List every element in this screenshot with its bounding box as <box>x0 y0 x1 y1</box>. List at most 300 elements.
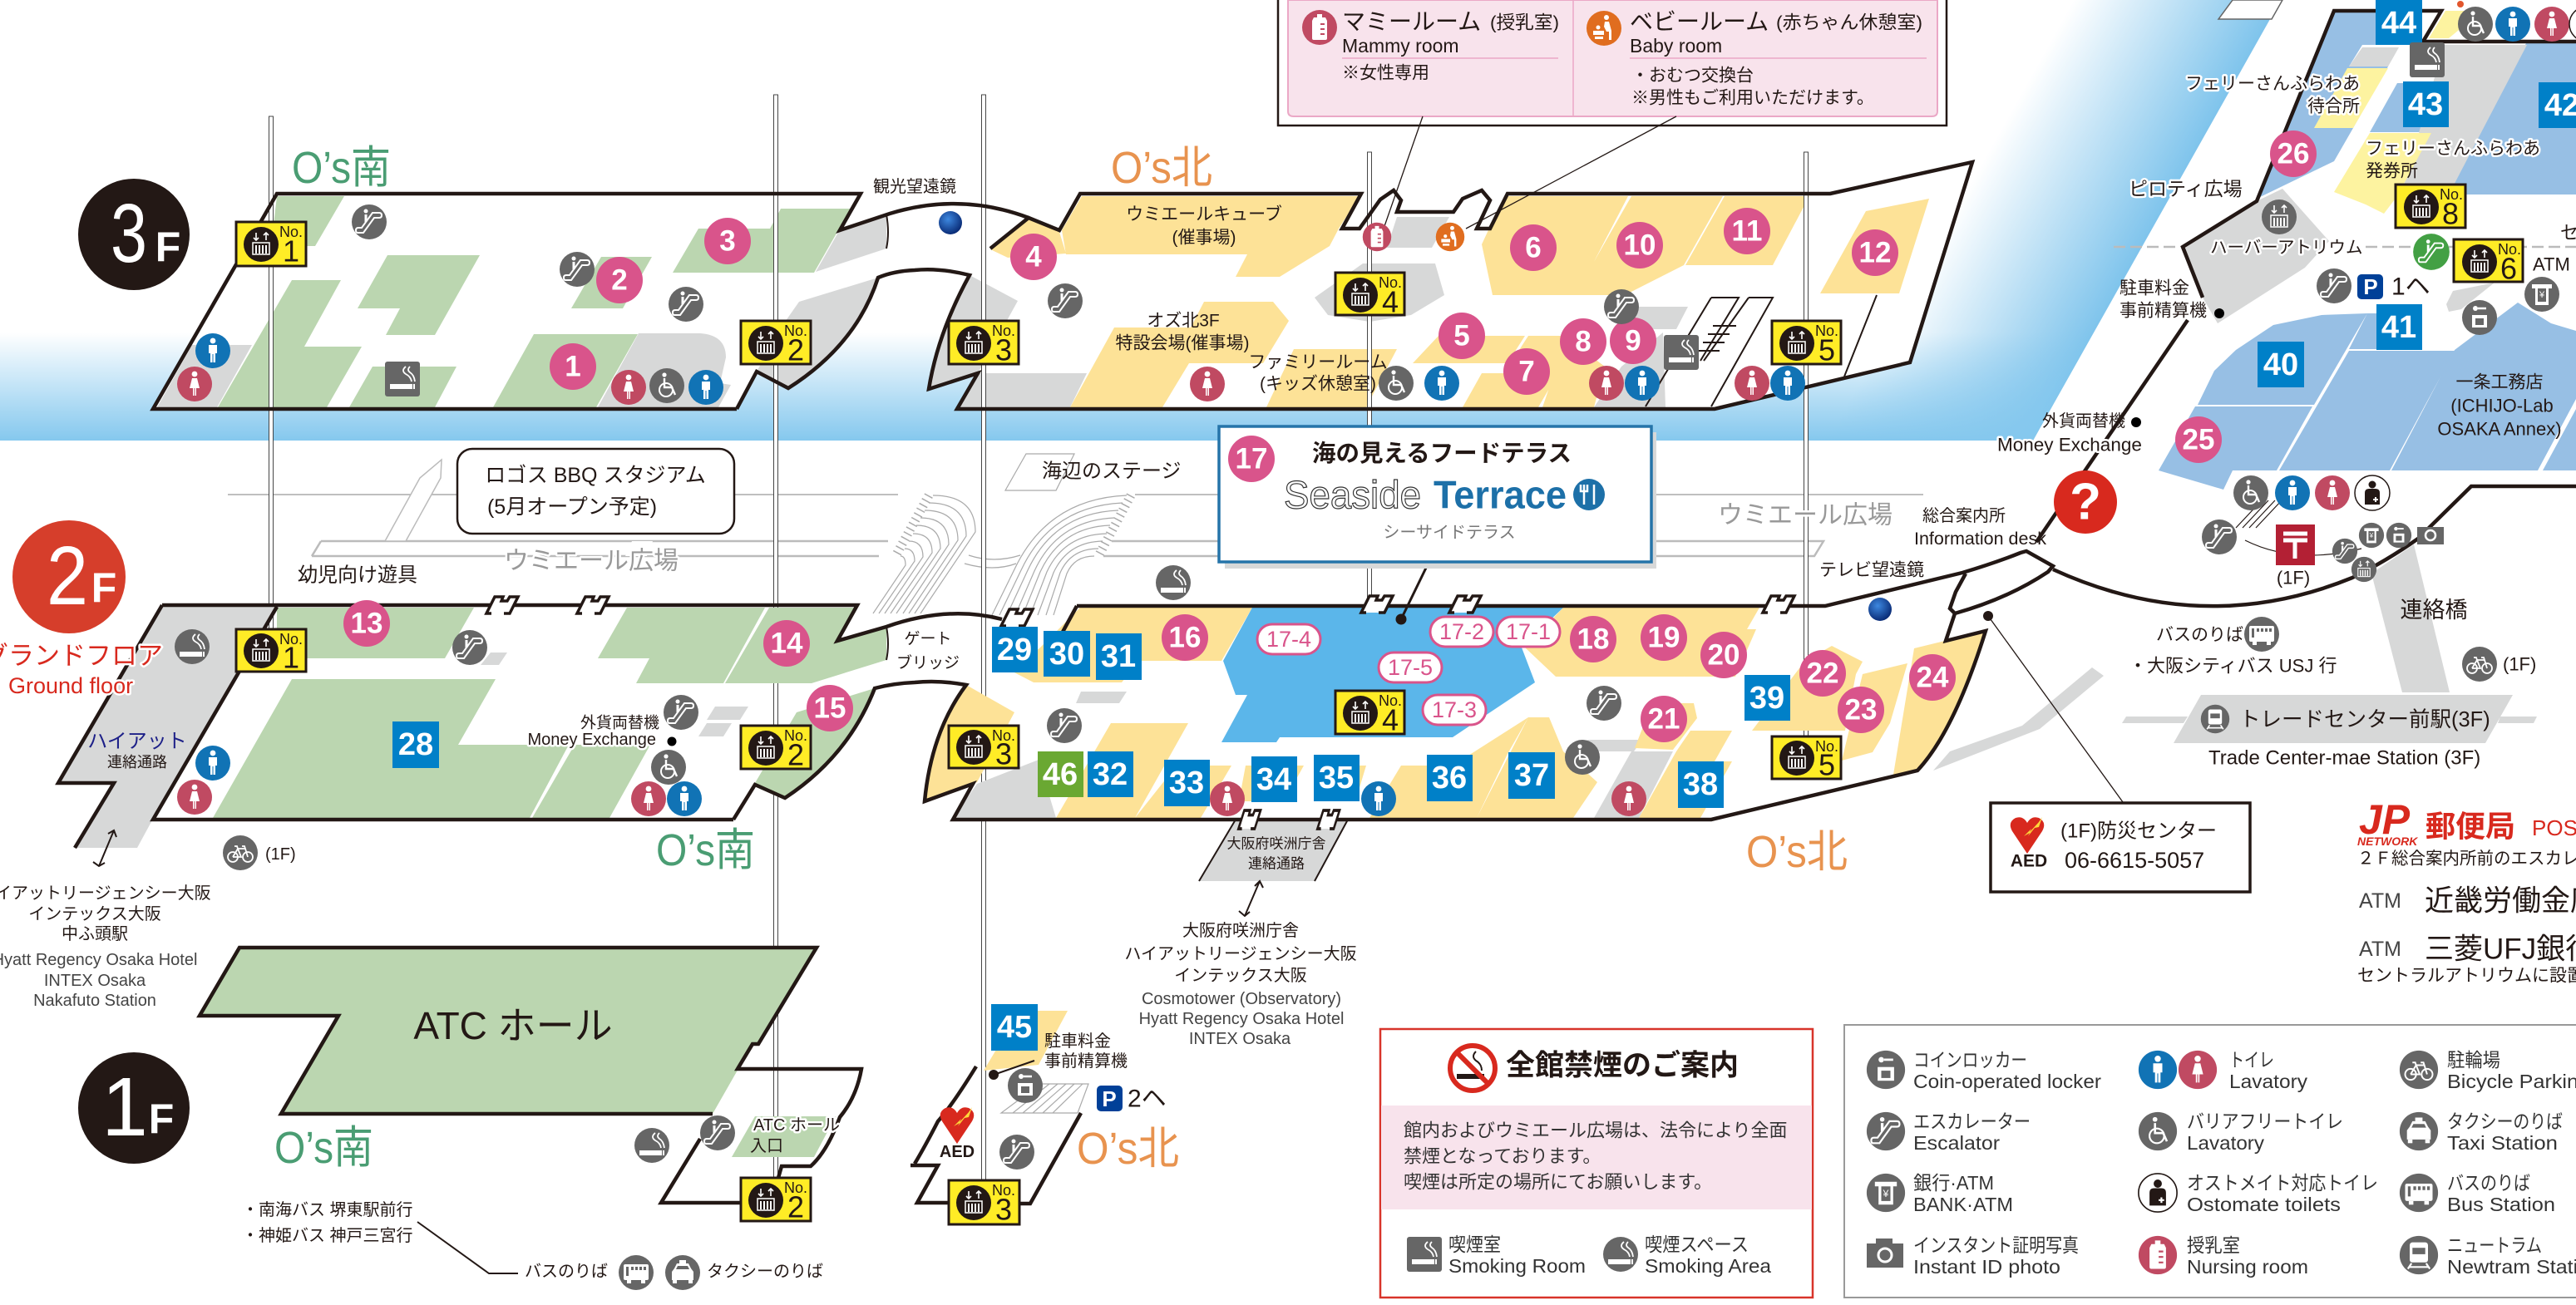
leader line to bus stop <box>417 1222 518 1273</box>
icon: baby room marker <box>1436 223 1464 251</box>
heading O's south 1F: O’s南 <box>274 1123 373 1173</box>
icon: parking P1: 1ヘ <box>2391 273 2430 301</box>
label: ATC hall entrance: 入口 <box>750 1137 783 1155</box>
icon: AED <box>940 1107 975 1161</box>
label: kids playground: 幼児向け遊具 <box>298 564 417 587</box>
text: ATM MUFG: ATM <box>2359 938 2401 961</box>
label: hyatt corridor: 連絡通路 <box>107 754 167 771</box>
shop 45: 45 <box>997 1010 1032 1045</box>
legend: smoking area <box>1603 1234 1771 1277</box>
shop 33: 33 <box>1169 766 1204 800</box>
marker 25 <box>2175 416 2222 463</box>
icon: no smoking <box>1450 1046 1495 1091</box>
heading: post office <box>2425 810 2576 843</box>
floor badge 1F <box>78 1052 190 1164</box>
marker 4: 4 <box>1025 241 1042 273</box>
legend: bus <box>2400 1172 2555 1215</box>
icon: elevator No.4 2F: No. <box>1379 692 1402 709</box>
legend: taxi <box>2400 1110 2563 1154</box>
icon: parking P2 <box>1097 1086 1167 1112</box>
3F outline <box>153 162 1972 409</box>
marker 11: 11 <box>1731 214 1763 248</box>
heading O's south 3F: O’s南 <box>292 143 391 193</box>
heading O's north 3F: O’s北 <box>1111 143 1212 193</box>
label: information desk: Information desk <box>1914 529 2046 549</box>
panel: seaside terrace sign <box>1219 426 1656 625</box>
label: ichijo: 一条工務店 <box>2456 372 2543 392</box>
icon: parking P2: P <box>1102 1086 1117 1111</box>
marker 8 <box>1560 318 1606 365</box>
legend: bus: Bus Station <box>2447 1194 2555 1215</box>
label: seaside stage: 海辺のステージ <box>1042 460 1182 482</box>
legend: smoking area: 喫煙スペース <box>1645 1234 1749 1255</box>
shop 28 <box>392 721 439 768</box>
panel: 2F floor plan <box>58 551 2053 1071</box>
callout: nursing and baby rooms <box>1278 0 1947 229</box>
icon: elevator No.8: 8 <box>2442 196 2459 231</box>
shop 44 <box>2376 0 2422 45</box>
note: women only: ※女性専用 <box>1342 63 1429 83</box>
icon: elevator No.1 3F: 1 <box>283 234 299 268</box>
icon: locker 1F <box>1008 1068 1043 1103</box>
icon: escalators 3F <box>352 204 1639 324</box>
label: bicycle 1F right <box>2462 647 2536 682</box>
terrace 17-5: 17-5 <box>1388 655 1433 680</box>
legend: ostomate: Ostomate toilets <box>2187 1194 2341 1215</box>
panel: harbor side building <box>1933 1 2576 771</box>
terrace 17-2: 17-2 <box>1439 619 1484 644</box>
label: cube <box>1126 204 1282 248</box>
legend: smoking room <box>1407 1234 1586 1277</box>
text: bus routes 1F: ・南海バス 堺東駅前行 <box>242 1200 413 1219</box>
callout: AED center <box>1983 611 2250 892</box>
icon: elevator No.3 3F: 3 <box>995 332 1012 367</box>
icon: telescope ball 2F <box>1868 598 1892 621</box>
marker 3: 3 <box>719 224 736 258</box>
floor badge 3F <box>78 179 190 290</box>
label: harbor atrium: ハーバーアトリウム <box>2210 238 2362 258</box>
shop 32: 32 <box>1093 757 1128 792</box>
label: plaza right: ウミエール広場 <box>1718 502 1893 529</box>
heading: post office: 郵便局 <box>2425 810 2515 843</box>
icon: elevator No.1 3F: No. <box>279 224 303 240</box>
subtitle: シーサイドテラス <box>1383 524 1516 542</box>
legend: lavatory: Lavatory <box>2229 1071 2308 1092</box>
shop 40: 40 <box>2263 347 2298 382</box>
icon: elevator No.1 3F <box>236 222 306 268</box>
legend: locker: Coin-operated locker <box>1913 1071 2101 1092</box>
marker 10: 10 <box>1624 229 1656 261</box>
icon: escalator atrium <box>2317 268 2351 303</box>
label: ATM right: ATM <box>2533 254 2570 274</box>
legend: camera: Instant ID photo <box>1913 1256 2060 1278</box>
marker 22: 22 <box>1807 657 1838 690</box>
shop 29: 29 <box>997 633 1032 667</box>
label: money exchange 2F: Money Exchange <box>527 731 656 749</box>
label: taxi stop 1F <box>665 1255 823 1290</box>
terrace 17-4: 17-4 <box>1266 627 1311 652</box>
icon: bicycle parking: (1F) <box>265 845 296 864</box>
label: baby room <box>1630 8 1922 57</box>
text: cosmotower destinations: インテックス大阪 <box>1174 966 1307 985</box>
legend: barrier-free: Lavatory <box>2187 1132 2265 1154</box>
shop 43 <box>2403 81 2449 127</box>
marker 1 <box>550 343 596 390</box>
icon: parking P1 <box>2357 273 2430 301</box>
icon: camera <box>2417 527 2444 544</box>
markers: harbor side <box>1914 0 2576 770</box>
label: ferry waiting <box>2185 75 2360 116</box>
marker 19: 19 <box>1648 622 1680 653</box>
icon: elevator No.5 3F: No. <box>1815 323 1838 339</box>
icon: elevator No.2 3F: No. <box>784 323 807 339</box>
text: cosmotower destinations: Cosmotower (Observatory) <box>1142 990 1341 1008</box>
icon: elevator No.5 3F <box>1772 321 1841 367</box>
label: piloti plaza: ピロティ広場 <box>2129 178 2243 199</box>
marker 7 <box>1503 348 1550 395</box>
panel: icon legend <box>1844 1025 2576 1298</box>
label: gate bridge: ゲート <box>904 630 952 648</box>
marker 2: 2 <box>611 264 628 296</box>
label: information desk <box>1914 506 2046 549</box>
shop 31: 31 <box>1101 639 1136 674</box>
plaza road lines and stage <box>228 454 1923 615</box>
shop 37: 37 <box>1514 758 1549 793</box>
shop 31 <box>1096 633 1142 680</box>
icon: grey elevator atrium <box>2262 199 2297 234</box>
text: hyatt destinations: Nakafuto Station <box>33 992 156 1010</box>
icon: elevator No.1 2F: No. <box>279 631 303 648</box>
marker 24 <box>1909 654 1956 701</box>
shop 29 <box>992 627 1038 672</box>
legend: escalator: エスカレーター <box>1913 1110 2031 1132</box>
marker 23 <box>1838 687 1884 733</box>
floor badge 1F: F <box>149 1096 174 1142</box>
text: bus routes 1F: ・神姫バス 神戸三宮行 <box>242 1226 413 1245</box>
label: cube: (催事場) <box>1172 228 1236 248</box>
shop 40 <box>2258 342 2304 387</box>
icon: elevator No.3 1F: No. <box>992 1182 1015 1199</box>
icon: elevator No.2 2F: No. <box>784 727 807 744</box>
legend: lavatory: トイレ <box>2229 1049 2274 1071</box>
icon: elevator No.3 1F: 3 <box>995 1192 1012 1227</box>
icon: elevator No.3 2F <box>949 726 1019 771</box>
floor badge 2F: F <box>91 564 116 611</box>
icon: lavatories atrium <box>2233 475 2390 510</box>
label: family room: (キッズ休憩室) <box>1260 374 1376 394</box>
icon: telescope ball 3F <box>939 211 962 234</box>
panel: post office and bank info <box>2357 796 2576 986</box>
icon: small services <box>2332 523 2411 582</box>
label: ferry ticket: 発券所 <box>2366 161 2418 181</box>
label: bicycle 1F right: (1F) <box>2503 653 2536 675</box>
legend: barrier-free <box>2139 1110 2343 1154</box>
sea background band <box>0 0 2282 441</box>
marker 3 <box>704 218 751 264</box>
legend: lavatory <box>2139 1049 2308 1092</box>
legend: bicycle: 駐輪場 <box>2447 1049 2500 1071</box>
icon: elevator No.4 3F: 4 <box>1382 284 1399 319</box>
label: parking payment 1F <box>1044 1032 1128 1071</box>
shop 39: 39 <box>1749 681 1784 716</box>
shop 36 <box>1427 755 1473 801</box>
callout: AED center: (1F)防災センター <box>2060 820 2217 843</box>
marker 23: 23 <box>1845 693 1877 726</box>
leader dot <box>989 1061 1034 1080</box>
terrace 17-5 <box>1379 652 1442 682</box>
legend: smoking room: Smoking Room <box>1448 1255 1586 1277</box>
label: parking payment 1F: 駐車料金 <box>1044 1032 1111 1051</box>
marker 1: 1 <box>565 351 581 382</box>
label: baby room: (赤ちゃん休憩室) <box>1776 12 1922 33</box>
marker 20: 20 <box>1708 638 1740 672</box>
logo: JP network: NETWORK <box>2357 835 2418 848</box>
legend: newtram <box>2400 1234 2576 1278</box>
plan callout: BBQ stadium <box>457 449 734 534</box>
marker 17: 17 <box>1236 442 1267 475</box>
marker 5 <box>1439 313 1485 359</box>
marker 6 <box>1510 224 1557 271</box>
label: ATC hall: ATC ホール <box>413 1004 613 1047</box>
text: cosmotower destinations <box>1124 921 1357 1048</box>
floor badge 3F: 3 <box>111 187 147 280</box>
marker 14: 14 <box>771 627 803 660</box>
legend: newtram: ニュートラム <box>2447 1234 2542 1256</box>
label: ichijo: OSAKA Annex) <box>2437 419 2562 439</box>
marker 17 <box>1228 436 1275 482</box>
icon: elevator No.8: No. <box>2440 186 2463 203</box>
label: ferry ticket <box>2366 140 2540 181</box>
legend: bicycle: Bicycle Parking <box>2447 1071 2576 1092</box>
info circle <box>2054 470 2117 534</box>
marker 24: 24 <box>1917 662 1949 693</box>
label: parking payment 1F: 事前精算機 <box>1044 1051 1128 1071</box>
icon: elevator No.2 2F <box>741 726 811 771</box>
icon: mammy room <box>1302 10 1337 45</box>
shop 38: 38 <box>1683 767 1718 802</box>
icon: elevator No.2 1F <box>741 1178 811 1224</box>
logo: seaside terrace: Seaside <box>1284 472 1421 517</box>
label: mammy room <box>1342 8 1559 57</box>
label: ground floor <box>0 642 163 698</box>
icon: cutlery <box>1573 479 1605 510</box>
label: gate bridge: ブリッジ <box>896 653 960 672</box>
label: family room: ファミリールーム <box>1248 352 1388 372</box>
label: telescope: 観光望遠鏡 <box>873 177 956 196</box>
shop 28: 28 <box>398 727 433 762</box>
icon: elevator No.3 3F <box>949 321 1019 367</box>
marker 9 <box>1610 318 1656 364</box>
legend: nursing room: 授乳室 <box>2187 1234 2240 1256</box>
legend: barrier-free: バリアフリートイレ <box>2187 1110 2343 1132</box>
legend: smoking room: 喫煙室 <box>1448 1234 1501 1255</box>
callout: AED center: 06-6615-5057 <box>2065 848 2204 873</box>
panel: no smoking notice <box>1380 1029 1813 1298</box>
marker 18 <box>1570 616 1616 662</box>
legend: smoking area: Smoking Area <box>1645 1255 1771 1277</box>
icon: elevator No.5 2F: No. <box>1815 738 1838 755</box>
icon: locker <box>2462 300 2497 335</box>
icon: escalator 1F south <box>700 1115 735 1150</box>
marker 16 <box>1162 614 1208 661</box>
panel: 1F floor plan south <box>200 948 861 1224</box>
marker 5: 5 <box>1453 319 1470 352</box>
marker 13: 13 <box>351 607 382 640</box>
shop 38 <box>1678 761 1724 808</box>
icon: lavatories 2F <box>177 740 1646 816</box>
icon: elevator No.3 3F: No. <box>992 323 1015 339</box>
vertical elevator shafts <box>269 95 1808 1182</box>
legend: escalator: Escalator <box>1913 1132 2000 1154</box>
logo: seaside terrace <box>1284 472 1567 517</box>
label: prefectural corridor: 連絡通路 <box>1248 856 1305 871</box>
floor badge 1F: 1 <box>101 1061 148 1154</box>
icon: elevator No.5 2F: 5 <box>1818 748 1835 781</box>
label: parking payment <box>2120 279 2224 321</box>
marker 19 <box>1641 614 1687 661</box>
label: ground floor: Ground floor <box>8 673 133 698</box>
logo: JP network: JP <box>2359 796 2411 843</box>
marker 12: 12 <box>1859 236 1891 269</box>
legend: camera: インスタント証明写真 <box>1913 1234 2079 1256</box>
marker 13 <box>343 600 390 647</box>
icon: smoking room top <box>2410 42 2445 77</box>
marker 14 <box>763 620 810 667</box>
marker 4 <box>1010 234 1057 280</box>
shop 33 <box>1164 760 1210 806</box>
heading O's north 2F: O’s北 <box>1746 827 1848 877</box>
label: bus stop USJ: ・大阪シティバス USJ 行 <box>2129 655 2337 677</box>
icon: baby room <box>1587 11 1621 46</box>
marker 20 <box>1700 632 1747 678</box>
legend: nursing room: Nursing room <box>2187 1256 2308 1278</box>
body text: 喫煙は所定の場所にてお願いします。 <box>1404 1172 1712 1192</box>
label: money exchange: 外貨両替機 <box>2042 411 2125 431</box>
legend: ostomate: オストメイト対応トイレ <box>2187 1172 2378 1194</box>
marker 26 <box>2270 130 2317 177</box>
icon: elevator No.6: No. <box>2498 241 2521 258</box>
text: bus routes 1F <box>242 1200 413 1245</box>
label: information desk: 総合案内所 <box>1922 506 2006 525</box>
text: cosmotower destinations: INTEX Osaka <box>1189 1030 1291 1048</box>
icon: elevator No.6: 6 <box>2500 251 2517 286</box>
label: parking payment: 事前精算機 <box>2120 301 2207 321</box>
body text <box>1404 1120 1788 1192</box>
label: ATC hall entrance: ATC ホール <box>753 1116 840 1135</box>
marker 22 <box>1799 650 1846 697</box>
icon: elevator No.4 3F: No. <box>1379 274 1402 291</box>
label: baby room: ベビールーム <box>1630 8 1769 35</box>
icon: elevator No.3 2F: 3 <box>995 736 1012 771</box>
legend: locker: コインロッカー <box>1913 1049 2027 1071</box>
text: hyatt destinations: 中ふ頭駅 <box>62 924 128 943</box>
logo: seaside terrace: Terrace <box>1434 472 1567 517</box>
icon: parking P2: 2ヘ <box>1128 1086 1167 1112</box>
label: money exchange 2F <box>527 713 677 749</box>
text: hyatt destinations: インテックス大阪 <box>28 904 161 923</box>
label: baby room: Baby room <box>1630 35 1722 57</box>
marker 21: 21 <box>1648 703 1680 735</box>
legend: ATM <box>1867 1172 2013 1215</box>
text: hyatt destinations: INTEX Osaka <box>44 972 146 990</box>
icon: parking P1: P <box>2363 274 2378 299</box>
legend: bicycle <box>2400 1049 2576 1092</box>
text: hyatt destinations <box>0 884 211 1010</box>
marker 15 <box>807 685 853 731</box>
icon: elevator No.3 1F <box>949 1180 1019 1227</box>
icon: elevator No.4 2F <box>1335 691 1404 736</box>
text: ATM Kinki <box>2359 884 2576 918</box>
terrace 17-2 <box>1430 617 1493 647</box>
icon: bicycle parking <box>223 835 296 870</box>
plan callout: BBQ stadium: (5月オープン予定) <box>487 495 657 519</box>
station label: トレードセンター前駅(3F) <box>2239 708 2490 731</box>
3F icons and markers <box>177 177 1898 405</box>
label: parking payment: 駐車料金 <box>2120 279 2189 298</box>
icon: smoking areas 2F <box>175 565 1191 664</box>
label: ATM right <box>2533 223 2576 274</box>
label: ferry waiting: フェリーさんふらわあ <box>2185 75 2360 93</box>
marker 15: 15 <box>814 692 846 725</box>
marker 18: 18 <box>1577 623 1609 655</box>
marker 12 <box>1852 229 1898 276</box>
label: mammy room: (授乳室) <box>1490 12 1559 33</box>
icon: mammy room marker <box>1363 223 1391 251</box>
marker 9: 9 <box>1625 324 1641 357</box>
legend: escalator <box>1867 1110 2031 1154</box>
label: ATC hall entrance <box>750 1116 840 1155</box>
label: special venue <box>1116 311 1249 352</box>
label: money exchange <box>1997 411 2142 456</box>
shop 42 <box>2539 82 2576 128</box>
arrow: prefectural direction <box>1239 881 1263 916</box>
icon: elevator No.3 2F: No. <box>992 727 1015 744</box>
terrace 17-3: 17-3 <box>1432 697 1477 722</box>
label: money exchange 2F: 外貨両替機 <box>580 713 659 731</box>
label: money exchange: Money Exchange <box>1997 434 2142 456</box>
terrace 17-1: 17-1 <box>1506 619 1551 644</box>
note: diaper changing: ※男性もご利用いただけます。 <box>1631 88 1874 108</box>
marker 10 <box>1616 222 1663 268</box>
body text: 禁煙となっております。 <box>1404 1145 1601 1167</box>
station label: Trade Center-mae Station (3F) <box>2208 746 2480 770</box>
panel: 1F floor plan north <box>910 1004 1179 1227</box>
icon: elevator No.2 2F: 2 <box>787 738 804 771</box>
shop 36: 36 <box>1432 761 1467 795</box>
shop 34 <box>1251 756 1297 802</box>
label: mammy room: マミールーム <box>1342 8 1481 35</box>
icon: elevator No.5 2F <box>1772 736 1841 781</box>
marker 21 <box>1641 696 1687 742</box>
label: connecting bridge: 連絡橋 <box>2400 598 2468 623</box>
label: bus stop USJ: バスのりば <box>2156 625 2243 645</box>
label: taxi stop 1F: タクシーのりば <box>707 1262 823 1281</box>
shop 45 <box>991 1004 1038 1051</box>
icon: elevator No.6 <box>2454 239 2523 286</box>
legend: ATM: 銀行·ATM <box>1913 1172 1994 1194</box>
icon: lavatories 3F <box>177 333 1805 405</box>
marker 11 <box>1724 208 1770 254</box>
icon: lavatories top <box>2458 7 2576 42</box>
shop 35: 35 <box>1319 761 1354 795</box>
shop 30: 30 <box>1049 637 1084 672</box>
icon: smoking rooms 3F <box>385 335 1699 396</box>
label: plaza left: ウミエール広場 <box>504 547 679 575</box>
shop 41 <box>2376 304 2422 350</box>
legend: taxi: Taxi Station <box>2447 1132 2558 1154</box>
marker 26: 26 <box>2277 138 2309 170</box>
terrace 17-1 <box>1497 617 1560 647</box>
